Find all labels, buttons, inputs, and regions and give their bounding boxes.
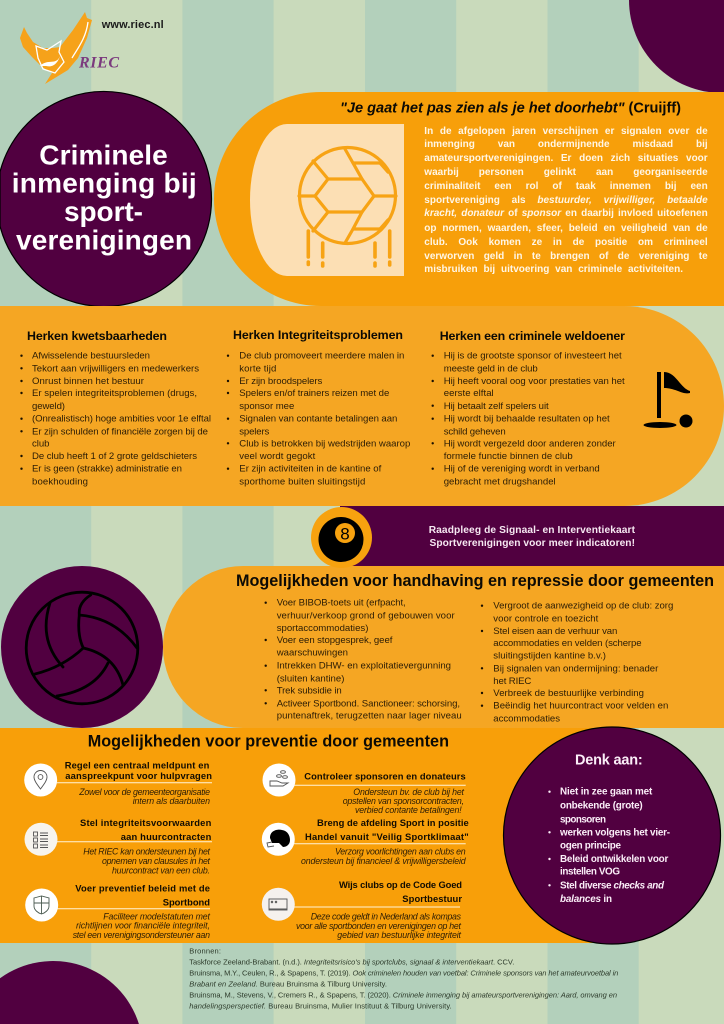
column: integriteitsproblemen: Signalen van contante betalingen aan — [239, 414, 397, 425]
list: handhaving left: Trek subsidie in — [277, 685, 342, 696]
website url: www.riec.nl — [101, 19, 164, 31]
column: kwetsbaarheden: Afwisselende bestuursleden — [32, 351, 150, 362]
column: integriteitsproblemen: sporthome buiten sluitingstijd — [239, 476, 365, 487]
title circle: verenigingen — [16, 224, 192, 255]
icon: location pin — [34, 771, 47, 789]
list: handhaving right: Stel eisen aan de verhuur van — [493, 626, 617, 637]
item: centraal meldpunt: Regel een centraal meldpunt en — [65, 760, 210, 770]
callout: denk aan: Denk aan: — [575, 752, 643, 768]
title circle: sport- — [64, 196, 143, 227]
item: centraal meldpunt — [24, 760, 212, 806]
icon: golf flag — [644, 372, 692, 428]
sources: Taskforce Zeeland-Brabant. (n.d.). Integriteitsrisico's bij sportclubs, signaal & interventiekaart. CCV. — [189, 958, 514, 966]
column: kwetsbaarheden: Herken kwetsbaarheden — [27, 329, 167, 343]
column: criminele weldoener: formele functie binnen de club — [444, 451, 573, 462]
title circle — [0, 92, 212, 306]
heading: preventie: Mogelijkheden voor preventie door gemeenten — [88, 733, 449, 751]
intro text block: club. Ook komen ze in de positie om crimineel — [424, 237, 708, 248]
item: afdeling sport: Verzorg voorlichtingen aan clubs en — [335, 847, 466, 857]
list: handhaving left: Voer een stopgesprek, geef — [277, 635, 393, 646]
column: integriteitsproblemen: Herken Integriteitsproblemen — [233, 328, 403, 342]
logo: RIEC — [20, 12, 119, 84]
list: handhaving left: puntenaftrek, terugzetten naar lager niveau — [277, 711, 462, 722]
item: sponsoren en donateurs: verbied contante betalingen! — [355, 805, 462, 815]
column: criminele weldoener: Hij heeft vooral oog voor prestaties van het — [444, 376, 625, 387]
column: kwetsbaarheden: Er zijn schulden of financiële zorgen bij de — [32, 426, 208, 437]
column: integriteitsproblemen: veel wordt gegokt — [239, 451, 316, 462]
panel: introduction — [214, 92, 724, 306]
intro text block — [424, 120, 708, 285]
item: integriteitsvoorwaarden: Het RIEC kan ondersteunen bij het — [83, 847, 211, 857]
intro text block: misbruiken bij uitvoering van criminele activiteiten. — [424, 264, 683, 275]
icon: browser window — [269, 899, 287, 910]
quote heading: "Je gaat het pas zien als je het doorhebt" (Cruijff) — [340, 101, 681, 117]
column: integriteitsproblemen: Club is betrokken bij wedstrijden waarop — [239, 438, 410, 449]
item: afdeling sport — [262, 817, 469, 866]
item: afdeling sport: Breng de afdeling Sport in positie — [317, 817, 469, 828]
banner: signaalkaart: Raadpleeg de Signaal- en Interventiekaart — [429, 525, 636, 536]
callout: denk aan: Beleid ontwikkelen voor — [560, 854, 668, 865]
sources — [189, 946, 618, 1010]
column: kwetsbaarheden — [20, 329, 211, 487]
icon: hand with coins — [270, 771, 288, 786]
list: handhaving left: Voer BIBOB-toets uit (erfpacht, — [277, 598, 406, 609]
column: criminele weldoener: Hij of de vereniging wordt in verband — [444, 464, 600, 475]
icon: helmet — [267, 830, 290, 847]
list: handhaving left: verhuur/verkoop grond of gebouwen voor — [277, 610, 455, 621]
item: preventief beleid: Voer preventief beleid met de — [75, 882, 210, 894]
item: afdeling sport: ondersteun bij financieel & vrijwilligersbeleid — [301, 856, 467, 866]
list: handhaving right: het RIEC — [493, 676, 531, 687]
item: code goed sportbestuur: Wijs clubs op de Code Goed — [339, 879, 462, 890]
list: handhaving left — [264, 598, 462, 722]
column: criminele weldoener — [432, 329, 625, 487]
title circle: inmenging bij — [12, 168, 197, 199]
callout: denk aan: instellen VOG — [560, 867, 620, 878]
list: handhaving left: Activeer Sportbond. Sanctioneer: schorsing, — [277, 698, 460, 709]
panel: herken — [0, 306, 724, 506]
column: criminele weldoener: Hij wordt bij behaalde resultaten op het — [444, 414, 610, 425]
item: code goed sportbestuur: voor alle sportbonden en verenigingen op het — [296, 921, 462, 931]
item: integriteitsvoorwaarden: opnemen van clausules in het — [102, 856, 211, 866]
sources: handelingsperspectief. Bureau Bruinsma, Mulier Instituut & Tilburg University. — [189, 1002, 452, 1010]
list: handhaving right — [481, 601, 673, 724]
item: preventief beleid: Faciliteer modelstatuten met — [103, 911, 211, 921]
list: handhaving left: (sluiten kantine) — [277, 673, 344, 684]
decorative purple circle bottom left — [0, 961, 139, 1024]
intro text block: In de afgelopen jaren verschijnen er signalen over de — [424, 126, 708, 137]
decorative purple circle top right — [629, 0, 724, 93]
column: criminele weldoener: Herken een criminele weldoener — [440, 329, 625, 343]
icon: shield — [34, 896, 49, 914]
column: criminele weldoener: eerste elftal — [444, 388, 494, 399]
list: handhaving right: Vergroot de aanwezigheid op de club: zorg — [493, 601, 673, 612]
item: integriteitsvoorwaarden — [24, 817, 212, 875]
column: integriteitsproblemen: Er zijn broodspelers — [239, 376, 323, 387]
item: integriteitsvoorwaarden: aan huurcontracten — [121, 831, 212, 842]
column: kwetsbaarheden: Tekort aan vrijwilligers en medewerkers — [32, 363, 199, 374]
icon: volleyball — [1, 566, 163, 728]
list: handhaving right: sluitingstijden kantine b.v.) — [493, 651, 606, 662]
item: preventief beleid: richtlijnen voor financiële integriteit, — [76, 921, 210, 931]
item: code goed sportbestuur: Deze code geldt in Nederland als kompas — [311, 912, 462, 922]
column: kwetsbaarheden: Er is geen (strakke) administratie en — [32, 464, 182, 475]
list: handhaving right: voor controle en toezicht — [493, 613, 599, 624]
panel: handhaving en repressie — [163, 566, 724, 728]
item: preventief beleid — [25, 882, 211, 940]
intro text block: sportvereniging als bestuurder, vrijwilliger, betaalde — [424, 195, 708, 206]
column: kwetsbaarheden: De club heeft 1 of 2 grote geldschieters — [32, 451, 197, 462]
column: integriteitsproblemen: De club promoveert meerdere malen in — [239, 351, 404, 362]
column: kwetsbaarheden: Onrust binnen het bestuur — [32, 376, 145, 387]
column: criminele weldoener: Hij is de grootste sponsor of investeert het — [444, 351, 622, 362]
item: sponsoren en donateurs: Ondersteun bv. de club bij het — [353, 787, 465, 797]
heading: handhaving: Mogelijkheden voor handhaving en repressie door gemeenten — [236, 572, 714, 590]
icon: eight ball: 8 — [340, 524, 350, 544]
column: kwetsbaarheden: Er spelen integriteitsproblemen (drugs, — [32, 388, 197, 399]
column: integriteitsproblemen: korte tijd — [239, 363, 276, 374]
banner: signaalkaart — [340, 506, 724, 567]
column: kwetsbaarheden: (Onrealistisch) hoge ambities voor 1e elftal — [32, 414, 211, 425]
banner: signaalkaart: Sportverenigingen voor meer indicatoren! — [430, 538, 635, 549]
callout: denk aan: sponsoren — [560, 814, 606, 825]
list: handhaving left: waarschuwingen — [276, 648, 348, 659]
callout: denk aan: werken volgens het vier- — [559, 827, 670, 838]
intro text block: kracht, donateur of sponsor en daarbij invloed uitoefenen — [424, 208, 708, 219]
list: handhaving right: accommodaties en velden (scherpe — [493, 638, 642, 649]
item: code goed sportbestuur — [262, 879, 462, 940]
sources: Bronnen: — [189, 946, 221, 955]
column: criminele weldoener: schild geheven — [444, 426, 506, 437]
item: afdeling sport: Handel vanuit "Veilig Sportklimaat" — [305, 831, 469, 842]
callout: denk aan: balances in — [560, 894, 612, 905]
icon: checklist — [34, 832, 48, 848]
list: handhaving right: Verbreek de bestuurlijke verbinding — [493, 688, 644, 699]
list: handhaving right: Bij signalen van ondermijning: benader — [493, 663, 659, 674]
column: integriteitsproblemen: Er zijn activiteiten in de kantine of — [239, 464, 382, 475]
column: kwetsbaarheden: geweld) — [32, 401, 65, 412]
callout: denk aan: onbekende (grote) — [560, 801, 643, 812]
logo: RIEC: RIEC — [78, 55, 119, 72]
column: integriteitsproblemen — [227, 328, 410, 487]
item: preventief beleid: stel een verenigingsondersteuner aan — [73, 930, 210, 940]
column: integriteitsproblemen: sponsor mee — [239, 401, 294, 412]
column: criminele weldoener: gebracht met drugshandel — [444, 476, 556, 487]
intro text block: waarbij personen gelinkt aan georganiseerde — [424, 167, 708, 178]
callout: denk aan — [504, 727, 720, 944]
item: centraal meldpunt: aanspreekpunt voor hulpvragen — [65, 770, 212, 781]
column: kwetsbaarheden: boekhouding — [32, 476, 88, 487]
title circle: Criminele — [39, 139, 168, 170]
list: handhaving right: Beëindig het huurcontract voor velden en — [493, 701, 668, 712]
sources: Bruinsma, M., Stevens, V., Cremers R., & Spapens, T. (2020). Criminele inmenging bij amateursportverenigingen: Aard, omvang en — [189, 990, 617, 1000]
sources: Bruinsma, M.Y., Ceulen, R., & Spapens, T. (2019). Ook criminelen houden van voetbal: Criminele sponsors van het amateurvoetbal in — [189, 968, 618, 978]
item: integriteitsvoorwaarden: Stel integriteitsvoorwaarden — [80, 817, 212, 828]
panel: preventie — [0, 728, 600, 943]
intro text block: inmenging van ondermijnende misdaad bij — [424, 139, 708, 150]
callout: denk aan: ogen principe — [560, 841, 622, 852]
item: code goed sportbestuur: gebied van bestuurlijke integriteit — [337, 930, 462, 940]
icon: eight ball — [311, 507, 372, 568]
intro text block: amateursportverenigingen. Er doen zich situaties voor — [424, 153, 708, 164]
icon: ball panel — [250, 124, 404, 276]
item: centraal meldpunt: intern als daarbuiten — [133, 796, 210, 806]
column: criminele weldoener: meeste geld in de club — [444, 363, 538, 374]
callout: denk aan: Niet in zee gaan met — [560, 787, 653, 798]
list: handhaving left: sportaccommodaties) — [277, 623, 368, 634]
column: kwetsbaarheden: club — [32, 438, 50, 449]
callout: denk aan: Stel diverse checks and — [560, 880, 665, 891]
intro text block: verworven geld in te brengen of de vereniging te — [424, 251, 708, 262]
item: sponsoren en donateurs: opstellen van sponsorcontracten, — [343, 796, 464, 806]
intro text block: criminaliteit een rol of taak innemen bij een — [424, 181, 708, 192]
item: integriteitsvoorwaarden: huurcontract van een club. — [112, 865, 210, 875]
item: code goed sportbestuur: Sportbestuur — [402, 893, 462, 904]
column: criminele weldoener: Hij wordt vergezeld door anderen zonder — [444, 438, 616, 449]
column: criminele weldoener: Hij betaalt zelf spelers uit — [444, 401, 549, 412]
sources: Brabant en Zeeland. Bureau Bruinsma & Tilburg University. — [189, 980, 387, 988]
item: preventief beleid: Sportbond — [163, 896, 210, 908]
list: handhaving right: accommodaties — [493, 713, 560, 724]
list: handhaving left: Intrekken DHW- en exploitatievergunning — [277, 661, 451, 672]
item: centraal meldpunt: Zowel voor de gemeenteorganisatie — [78, 787, 210, 797]
item: sponsoren en donateurs — [262, 764, 466, 815]
column: integriteitsproblemen: Spelers en/of trainers reizen met de — [239, 388, 389, 399]
intro text block: op normen, waarden, sfeer, beleid en veiligheid van de — [424, 223, 708, 234]
column: integriteitsproblemen: spelers — [239, 426, 270, 437]
item: sponsoren en donateurs: Controleer sponsoren en donateurs — [304, 770, 466, 782]
